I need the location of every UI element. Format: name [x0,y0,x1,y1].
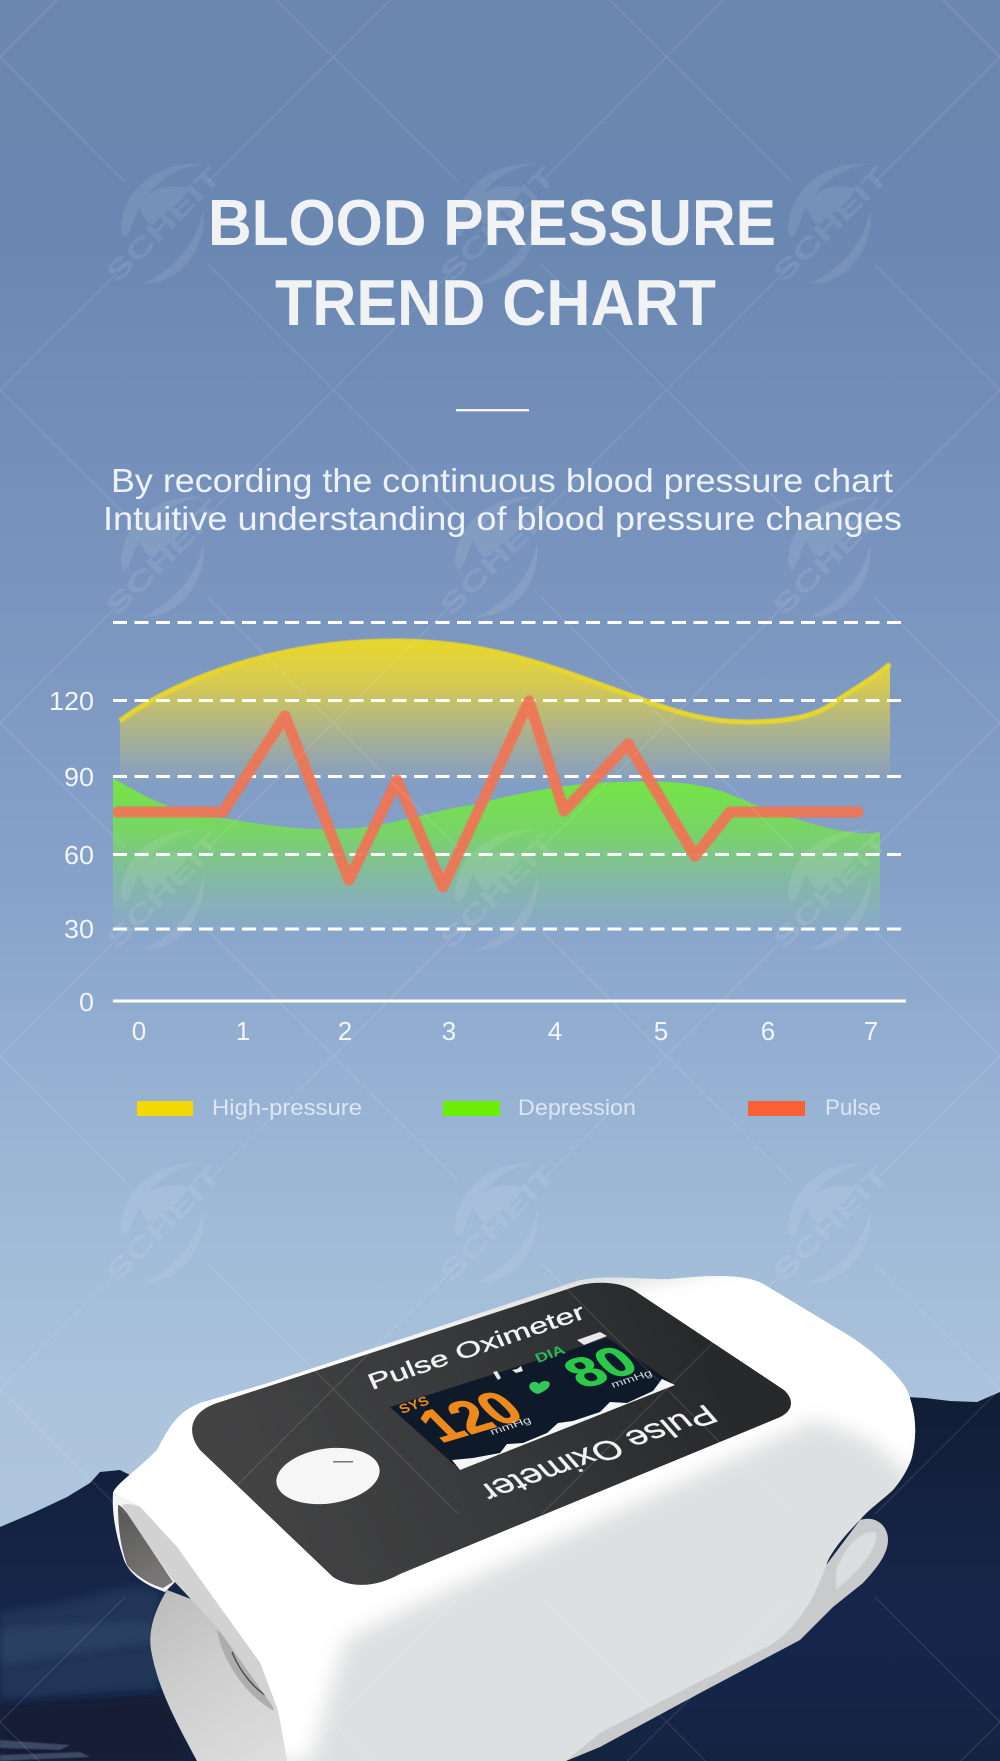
y axis labels: 60 [64,840,94,870]
power button [273,1442,383,1510]
systolic reading: 120 [405,1381,536,1452]
legend item: depression [443,1095,636,1120]
depression area [113,778,880,932]
cushion crack [232,1652,270,1698]
legend item: depression: Depression [518,1095,636,1120]
watermark logos: SCHEIT [100,161,228,288]
legend [137,1095,881,1120]
legend item: high-pressure: High-pressure [212,1095,362,1120]
watermark logos: SCHEIT [767,827,895,954]
watermark logos: SCHEIT [767,494,895,621]
subtitle [103,462,902,537]
screen: 80 [552,1338,650,1397]
right finger pad and underside lip [500,1519,888,1761]
title: TREND CHART [275,266,716,339]
left rim [113,1493,175,1592]
heart [529,1381,550,1394]
x axis labels [132,1016,878,1046]
divider under title [456,409,529,411]
pad highlight [836,1532,876,1590]
title: BLOOD PRESSURE [208,186,776,259]
black control panel [192,1283,791,1585]
pulse line [118,701,858,887]
x axis labels: 4 [548,1016,562,1046]
body highlight [113,1276,916,1761]
watermark logos [100,161,895,1287]
battery icon [577,1332,607,1345]
watermark logos: SCHEIT [100,1160,228,1287]
x axis line [113,1000,906,1002]
diastolic reading: DIA [532,1342,568,1366]
watermark logos: SCHEIT [434,827,562,954]
x axis labels: 6 [761,1016,775,1046]
y axis labels [49,686,94,1017]
x axis labels: 5 [654,1016,668,1046]
watermark logos: SCHEIT [767,1160,895,1287]
legend item: pulse [748,1095,881,1120]
watermark logos: SCHEIT [434,161,562,288]
lower finger cushion [150,1590,300,1761]
watermark logos: SCHEIT [100,827,228,954]
dashed grid lines [113,622,905,929]
x axis labels: 0 [132,1016,146,1046]
y axis labels: 30 [64,914,94,944]
x axis labels: 2 [338,1016,352,1046]
screen: mmHg [488,1415,533,1438]
watermark logos: SCHEIT [434,1160,562,1287]
area chart [49,622,906,1046]
y axis labels: 120 [49,686,94,716]
subtitle: Intuitive understanding of blood pressure changes [103,500,902,537]
screen: mmHg [609,1368,654,1391]
high-pressure area [120,641,890,790]
pulse oximeter device [112,1276,916,1761]
device body [113,1276,915,1761]
legend item: pulse: Pulse [825,1095,881,1120]
left sensor opening [118,1505,173,1588]
watermark logos: SCHEIT [434,494,562,621]
title [208,186,776,339]
x axis labels: 7 [864,1016,878,1046]
legend item: high-pressure [137,1095,362,1120]
x axis labels: 3 [442,1016,456,1046]
label: Pulse Oximeter (top): Pulse Oximeter [364,1299,589,1395]
bluetooth and sound icons [493,1366,523,1380]
cushion dent [217,1630,274,1711]
screen [390,1332,675,1470]
systolic reading: SYS [396,1393,432,1417]
waveform [452,1379,675,1470]
label: Pulse Oximeter (inverted): Pulse Oximeter [473,1399,725,1508]
silver inner strip [122,1504,273,1707]
mountains [0,1392,1000,1761]
y axis labels: 0 [79,987,94,1017]
x axis labels: 1 [236,1016,250,1046]
y axis labels: 90 [64,762,94,792]
watermark logos: SCHEIT [100,494,228,621]
subtitle: By recording the continuous blood pressure chart [111,462,893,499]
watermark logos: SCHEIT [767,161,895,288]
